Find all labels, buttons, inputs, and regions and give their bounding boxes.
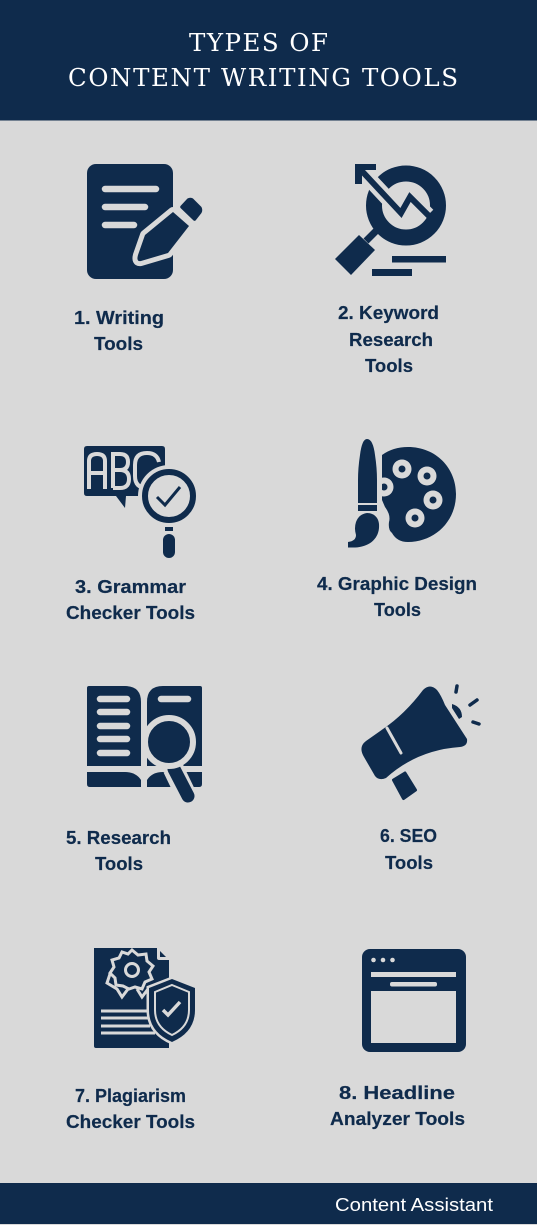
label: 6. SEO Tools: Tools [385, 852, 433, 873]
label: 1. Writing Tools: 1. Writing [74, 307, 164, 328]
icon: open book with magnifier [87, 686, 202, 796]
label: 6. SEO Tools [380, 825, 437, 873]
label: 2. Keyword Research Tools: 2. Keyword [338, 302, 439, 323]
label: 7. Plagiarism Checker Tools: 7. Plagiarism [75, 1085, 186, 1106]
header banner [0, 0, 537, 120]
label: 8. Headline Analyzer Tools [330, 1082, 465, 1129]
label: 6. SEO Tools: 6. SEO [380, 825, 437, 846]
icon: document with pencil [87, 164, 200, 279]
label: 1. Writing Tools: Tools [94, 333, 143, 354]
icon: magnifier with trend arrow [335, 164, 446, 276]
footer credit: Content Assistant [335, 1194, 493, 1215]
label: 3. Grammar Checker Tools: Checker Tools [66, 602, 195, 623]
label: 8. Headline Analyzer Tools: 8. Headline [339, 1082, 455, 1103]
panel: seo tools [361, 686, 479, 873]
icon: palette and brush [348, 439, 456, 550]
label: 7. Plagiarism Checker Tools: Checker Tools [66, 1111, 195, 1132]
icon: megaphone [361, 686, 479, 798]
title: CONTENT WRITING TOOLS [68, 63, 458, 92]
icon: ABC bubble with check magnifier [84, 446, 200, 558]
label: 5. Research Tools: 5. Research [66, 827, 171, 848]
title [68, 28, 458, 92]
icon: browser window [362, 949, 466, 1052]
label: 4. Graphic Design Tools: Tools [374, 599, 421, 620]
label: 3. Grammar Checker Tools: 3. Grammar [75, 576, 186, 597]
label: 2. Keyword Research Tools [338, 302, 439, 376]
label: 4. Graphic Design Tools: 4. Graphic Design [317, 573, 477, 594]
label: 8. Headline Analyzer Tools: Analyzer Tools [330, 1108, 465, 1129]
panel: headline analyzer tools [330, 949, 466, 1129]
panel: writing tools [74, 164, 200, 354]
label: 2. Keyword Research Tools: Research [349, 329, 433, 350]
panel: keyword research tools [335, 164, 446, 376]
panel: graphic design tools [317, 439, 477, 620]
icon: certificate with shield [94, 948, 195, 1048]
label: 4. Graphic Design Tools [317, 573, 477, 620]
label: 5. Research Tools [66, 827, 171, 874]
label: 1. Writing Tools [74, 307, 164, 354]
panel: research tools [66, 686, 202, 874]
footer bar [0, 1183, 537, 1224]
panel: plagiarism checker tools [66, 948, 195, 1132]
panel: grammar checker tools [66, 446, 200, 623]
label: 7. Plagiarism Checker Tools [66, 1085, 195, 1132]
label: 5. Research Tools: Tools [95, 853, 143, 874]
title: TYPES OF [189, 28, 328, 57]
label: 3. Grammar Checker Tools [66, 576, 195, 623]
label: 2. Keyword Research Tools: Tools [365, 355, 413, 376]
